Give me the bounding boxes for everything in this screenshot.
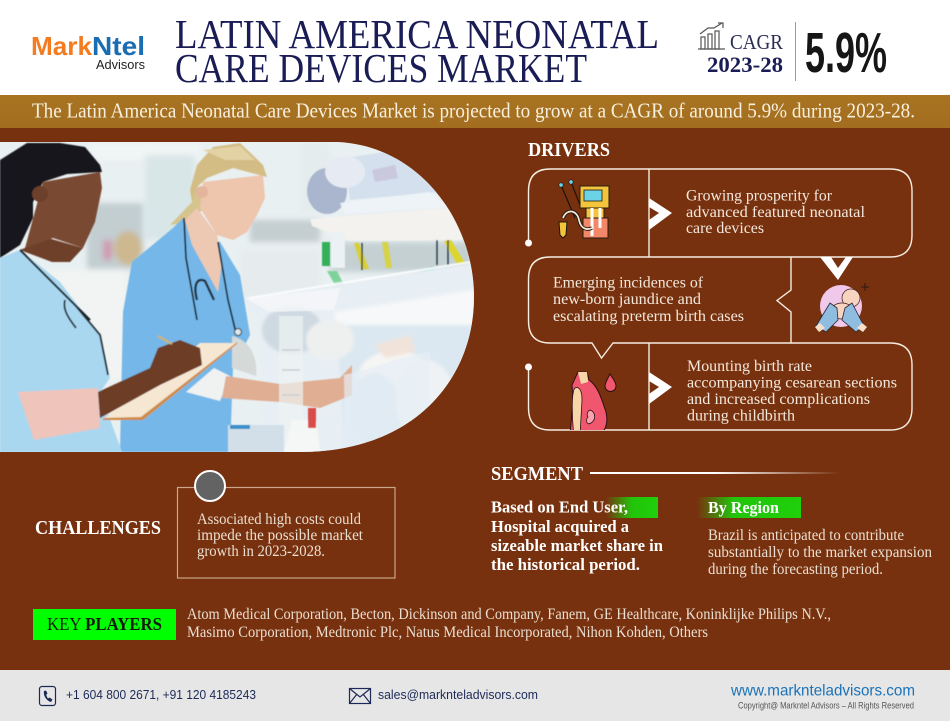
text: challenge: impede the possible market: [197, 527, 364, 544]
title: CARE DEVICES MARKET: [175, 45, 587, 91]
text: region heading: By Region: [708, 498, 780, 517]
challenge box: [178, 488, 395, 578]
left nurse: [0, 250, 122, 452]
text: driver 3: accompanying cesarean sections: [687, 374, 897, 392]
text: copyright: Copyright@ Markntel Advisors – All Rights Reserved: [738, 700, 914, 710]
photo: nurses at neonatal incubator: [0, 142, 480, 454]
text: driver 3: and increased complications: [687, 391, 870, 408]
right nurse: [170, 186, 202, 226]
text: driver 3: during childbirth: [687, 408, 795, 424]
icon: phone: [40, 686, 56, 706]
text: driver 1: advanced featured neonatal: [686, 204, 866, 221]
icon: pregnant woman: [570, 372, 616, 436]
text: driver 2: escalating preterm birth cases: [553, 308, 744, 325]
key players badge: KEY PLAYERS: [47, 614, 162, 634]
highlight: region: [697, 497, 801, 518]
header: [0, 0, 950, 95]
text: website: www.marknteladvisors.com: [730, 682, 915, 700]
text: driver 2: Emerging incidences of: [553, 274, 704, 292]
icon: grey dot: [195, 471, 225, 501]
text: driver 1: care devices: [686, 220, 764, 237]
heading: drivers: DRIVERS: [528, 139, 610, 161]
panel: key players: [33, 606, 831, 641]
text: end user: [491, 498, 664, 574]
text: end user: Based on End User,: [491, 498, 628, 516]
text: region: during the forecasting period.: [708, 561, 883, 578]
logo: Mark: [31, 31, 93, 61]
text: email: sales@marknteladvisors.com: [378, 687, 538, 702]
icon: newborn in gloved hands: [815, 283, 869, 332]
arrow: driver 2: [820, 257, 853, 280]
text: driver 2: [553, 274, 744, 325]
arm with sleeve: [232, 336, 256, 376]
text: driver 3: Mounting birth rate: [687, 358, 812, 375]
text: region: [708, 527, 932, 578]
logo: Advisors: [96, 57, 145, 72]
driver flow outline: [528, 169, 912, 430]
text: players: Atom Medical Corporation, Becton, Dickinson and Company, Fanem, GE Healthcare, Koninklijke Philips N.V.,: [187, 606, 831, 623]
heading: challenges: CHALLENGES: [35, 517, 161, 539]
heading: segment: SEGMENT: [491, 463, 584, 485]
text: end user: sizeable market share in: [491, 536, 664, 555]
clipboard: [102, 343, 238, 420]
text: challenge: [197, 511, 364, 560]
footer: [0, 670, 950, 721]
text: region: substantially to the market expansion: [708, 544, 932, 561]
logo: Ntel: [92, 31, 145, 61]
title: LATIN AMERICA NEONATAL: [175, 11, 659, 57]
panel: segment: [491, 463, 932, 578]
text: end user: the historical period.: [491, 555, 640, 574]
highlight: end user: [606, 497, 658, 518]
text: players: [187, 606, 831, 641]
CAGR label: 2023-28: [707, 52, 783, 77]
CAGR value: 5.9%: [805, 21, 887, 85]
arrow: driver 1: [649, 198, 672, 230]
text: phone: +1 604 800 2671, +91 120 4185243: [66, 687, 256, 702]
incubator front panel: [245, 288, 340, 312]
writing hand and arm: [98, 340, 202, 418]
text: driver 2: new-born jaundice and: [553, 291, 701, 308]
incubator body: [304, 261, 474, 452]
panel: drivers: [525, 139, 912, 436]
text: driver 1: Growing prosperity for: [686, 188, 833, 204]
text: driver 1: [686, 188, 866, 237]
text: end user: Hospital acquired a: [491, 517, 629, 536]
text: challenge: Associated high costs could: [197, 511, 361, 528]
incubator hood and shelf: [345, 152, 438, 200]
text: driver 3: [687, 358, 897, 424]
text: players: Masimo Corporation, Medtronic Plc, Natus Medical Incorporated, Nihon Kohden, Others: [187, 624, 708, 641]
icon: growth chart: [698, 23, 725, 49]
panel: challenges: [35, 471, 395, 578]
CAGR label: CAGR: [730, 30, 783, 54]
logo: [31, 31, 145, 72]
arrow: driver 3: [649, 372, 672, 404]
CAGR label: [707, 30, 783, 77]
icon: mail: [350, 688, 370, 704]
key players badge: [33, 609, 176, 640]
text: region: Brazil is anticipated to contribute: [708, 527, 904, 544]
title: [175, 11, 659, 91]
text: challenge: growth in 2023-2028.: [197, 543, 325, 560]
icon: neonatal device: [559, 180, 609, 238]
